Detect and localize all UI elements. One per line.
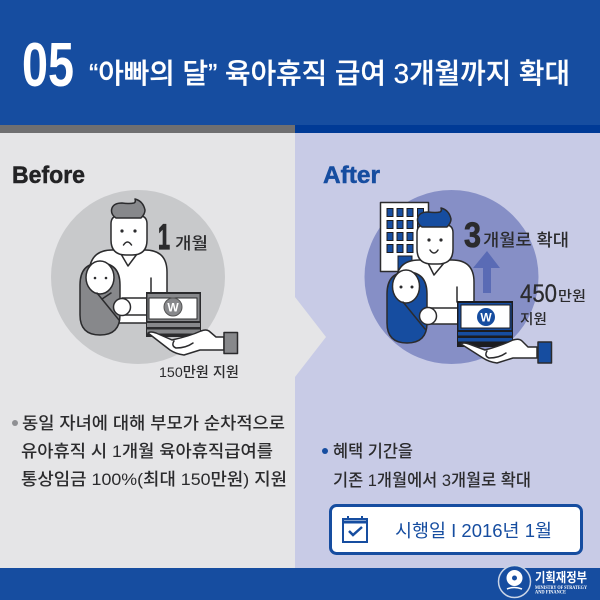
icon: calendar check (343, 516, 367, 542)
icon: open hand (148, 330, 238, 355)
logo: ministry name: 기획재정부 (535, 570, 587, 585)
label: 3 months: 개월로 확대 (483, 231, 569, 250)
header band (0, 0, 600, 125)
icon: baby (387, 270, 458, 343)
illustration: after (364, 190, 586, 364)
label: 3 months: 3 (464, 216, 481, 255)
label: 4.5 million won (520, 280, 586, 327)
icon: growth arrow (473, 251, 500, 293)
label: 4.5 million won: 지원 (520, 311, 547, 327)
label: 3 months (464, 216, 569, 255)
logo: ministry name (535, 570, 587, 596)
icon: open hand (461, 339, 552, 363)
text block: before description: 통상임금 100%(최대 150만원) 지원 (21, 470, 287, 489)
label: 1 month: 1 (158, 218, 170, 257)
panel: after background (295, 133, 600, 568)
callout: effective date: 시행일 I 2016년 1월 (395, 521, 552, 541)
text block: after description: 혜택 기간을 (333, 442, 413, 461)
number: 05 (22, 31, 74, 100)
text block: after description: 기존 1개월에서 3개월로 확대 (333, 471, 531, 490)
callout: effective date (330, 506, 582, 554)
icon: money (146, 292, 201, 337)
heading: before: Before (12, 162, 85, 189)
icon: building (380, 202, 428, 272)
panel: before background (0, 133, 295, 568)
label: 4.5 million won: 만원 (558, 288, 586, 304)
text block: before description (12, 414, 287, 489)
icon: money (457, 301, 513, 347)
header strip: after (295, 125, 600, 133)
text block: before description: 유아휴직 시 1개월 육아휴직급여를 (21, 442, 273, 461)
icon: father (396, 208, 474, 323)
illustration: before (51, 190, 239, 380)
text block: before description: 동일 자녀에 대해 부모가 순차적으로 (22, 414, 285, 433)
arrow: before to after (295, 297, 326, 377)
label: 4.5 million won: 450 (520, 280, 557, 308)
text block: after description (322, 442, 531, 490)
logo: ministry emblem (498, 566, 530, 598)
label: 1 month (158, 218, 208, 257)
heading: after: After (323, 162, 380, 189)
footer band (0, 568, 600, 600)
label: 1 month: 개월 (175, 234, 208, 253)
title: “아빠의 달” 육아휴직 급여 3개월까지 확대 (89, 58, 570, 89)
label: 1.5 million won: 150만원 지원 (159, 364, 239, 380)
icon: money: W (480, 310, 492, 324)
header strip: before (0, 125, 295, 133)
icon: father (89, 199, 167, 323)
circle backdrop (51, 190, 225, 364)
icon: baby (80, 261, 147, 335)
logo: ministry name: AND FINANCE (535, 590, 566, 596)
circle backdrop (364, 190, 538, 364)
icon: money: W (167, 300, 179, 314)
